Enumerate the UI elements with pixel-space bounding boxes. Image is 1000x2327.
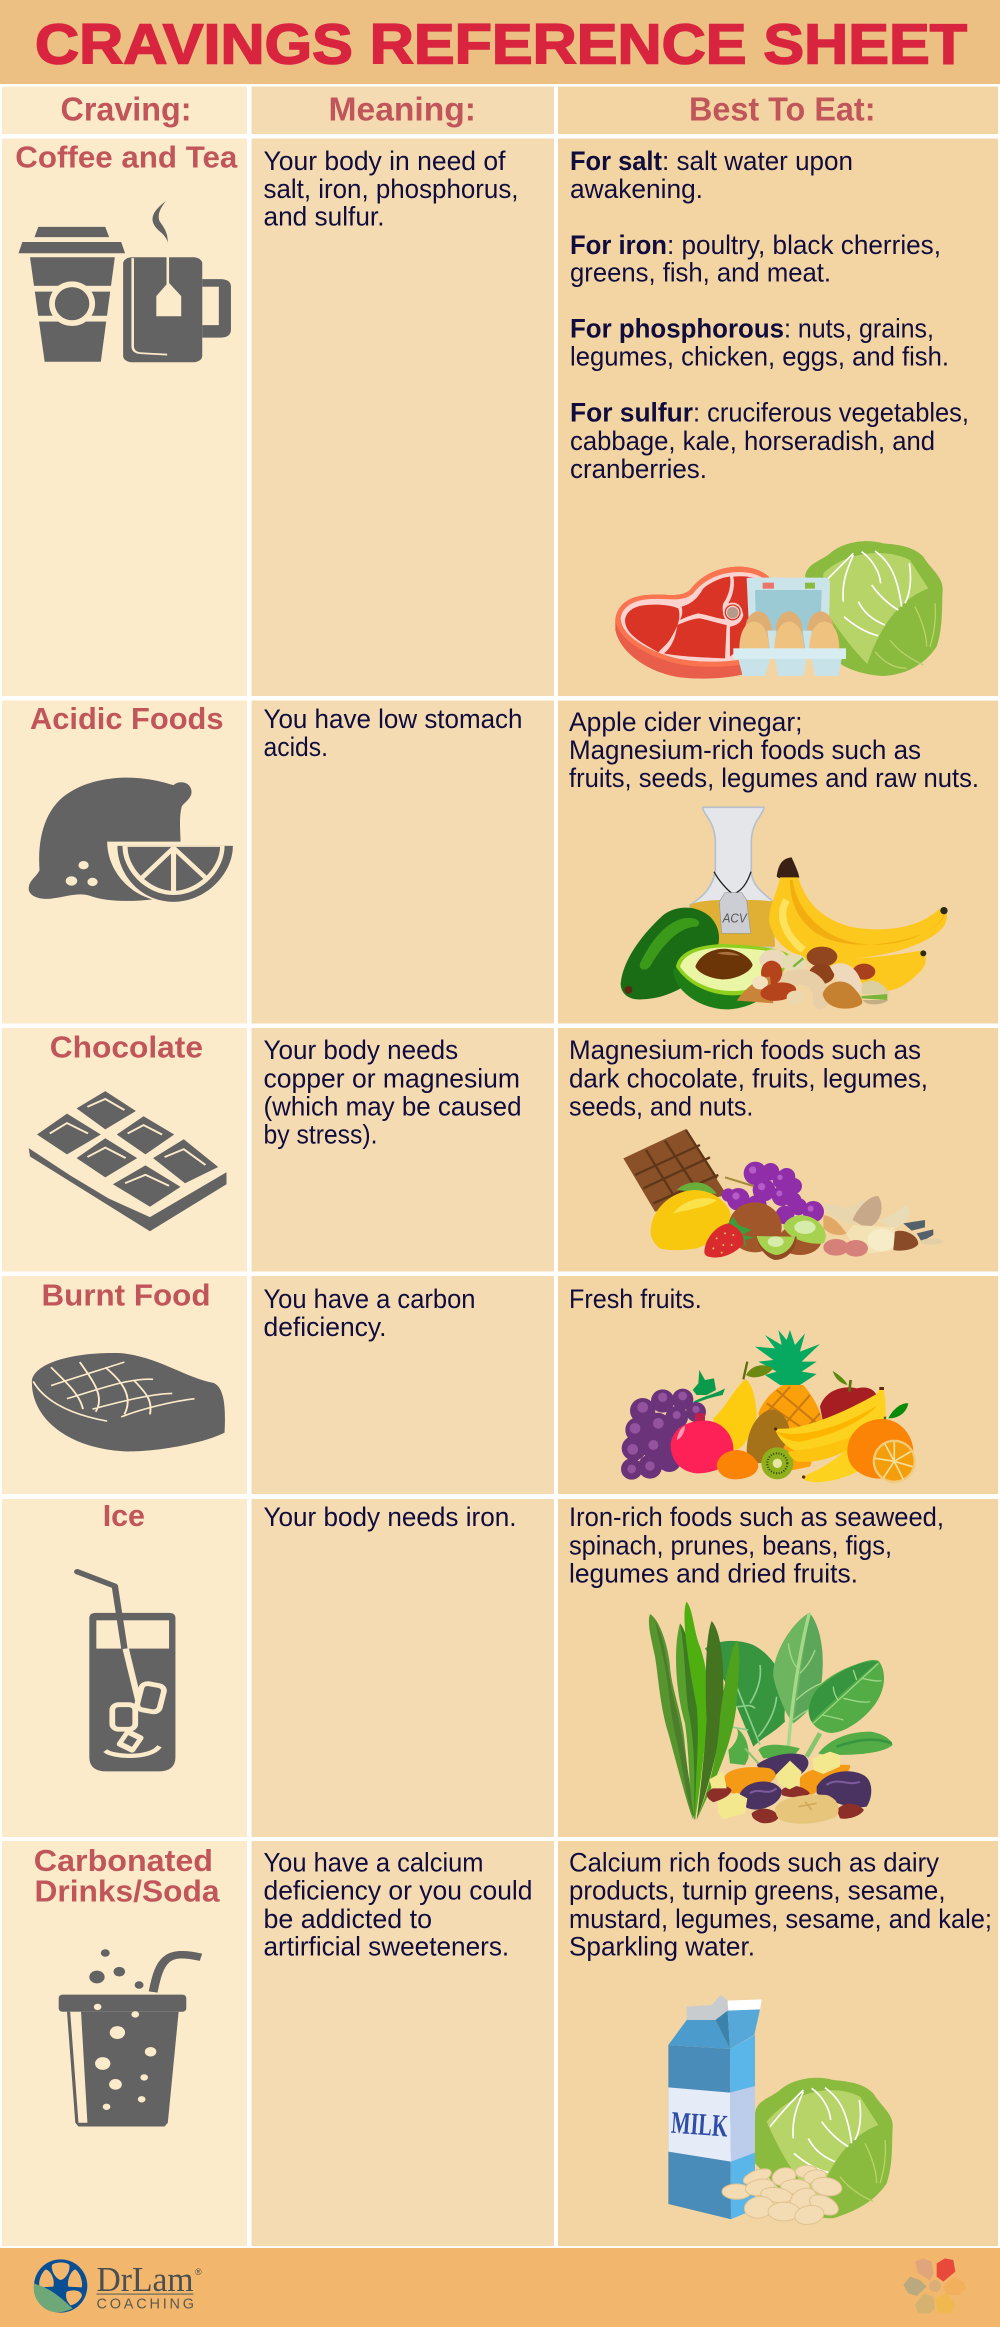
meaning text: acids. <box>264 732 328 762</box>
best to eat text: Magnesium-rich foods such as <box>569 735 921 765</box>
best to eat text: For salt <box>570 146 662 176</box>
icon: lemon <box>29 778 234 902</box>
food illustration: fresh fruits <box>621 1330 916 1483</box>
best to eat text: : cruciferous vegetables, <box>693 398 969 428</box>
best to eat text: legumes and dried fruits. <box>569 1558 858 1588</box>
logo: DrLam Coaching <box>34 2259 202 2313</box>
food illustration: meat, eggs and cabbage <box>615 541 943 679</box>
food illustration: vinegar, avocado, bananas, nuts <box>621 807 948 1009</box>
best to eat text: awakening. <box>570 174 703 204</box>
meaning text: Your body needs <box>264 1035 458 1065</box>
best to eat text: For iron <box>570 230 667 260</box>
food illustration: seaweed, spinach, dried fruits <box>649 1602 893 1824</box>
best to eat text: For sulfur <box>570 398 693 428</box>
best to eat text: fruits, seeds, legumes and raw nuts. <box>569 763 979 793</box>
best to eat text <box>570 146 969 484</box>
best to eat text: : salt water upon <box>662 146 853 176</box>
craving name: Burnt Food <box>42 1278 210 1313</box>
panel: chocolate row <box>2 1028 998 1272</box>
best to eat text: : poultry, black cherries, <box>667 230 941 260</box>
best to eat text: Sparkling water. <box>569 1932 755 1962</box>
panel: ice row <box>2 1498 998 1837</box>
logo wordmark: DrLam <box>96 2260 194 2299</box>
best to eat text: cranberries. <box>570 454 707 484</box>
best to eat text <box>569 1848 992 1962</box>
logo tagline: COACHING <box>96 2296 194 2312</box>
title band <box>0 0 1000 84</box>
meaning text: copper or magnesium <box>264 1064 520 1094</box>
icon: coloured flower mark <box>903 2258 966 2313</box>
best to eat text <box>569 1502 944 1588</box>
best to eat text: Magnesium-rich foods such as <box>569 1035 921 1065</box>
best to eat text <box>569 707 979 793</box>
title: CRAVINGS REFERENCE SHEET <box>35 12 967 76</box>
food illustration: milk, cabbage, beans: MILK <box>670 2105 730 2144</box>
food illustration: milk, cabbage, beans <box>668 1995 893 2227</box>
icon: chocolate bar <box>29 1091 226 1231</box>
panel: acidic foods row <box>2 700 998 1024</box>
best to eat text: spinach, prunes, beans, figs, <box>569 1531 892 1561</box>
icon: soda cup <box>59 1949 201 2127</box>
best to eat text: Apple cider vinegar; <box>569 707 802 737</box>
best to eat text: dark chocolate, fruits, legumes, <box>569 1064 928 1094</box>
meaning text: Your body needs iron. <box>264 1502 516 1532</box>
meaning text: You have a calcium <box>264 1848 484 1878</box>
header: best to eat: Best To Eat: <box>689 90 876 128</box>
best to eat text: Calcium rich foods such as dairy <box>569 1848 939 1878</box>
meaning text: deficiency. <box>264 1312 386 1342</box>
craving name: Coffee and Tea <box>15 140 238 174</box>
meaning text: You have a carbon <box>264 1284 476 1314</box>
best to eat text: greens, fish, and meat. <box>570 258 831 288</box>
meaning text <box>264 1848 532 1962</box>
meaning text: You have low stomach <box>264 704 522 734</box>
best to eat text: Iron-rich foods such as seaweed, <box>569 1502 944 1532</box>
footer band <box>0 2248 1000 2327</box>
best to eat text: seeds, and nuts. <box>569 1092 753 1122</box>
panel: carbonated drinks row <box>2 1841 998 2246</box>
food illustration: chocolate, fruit and nuts <box>623 1129 943 1260</box>
best to eat text <box>569 1035 928 1122</box>
meaning text: salt, iron, phosphorus, <box>264 174 518 204</box>
table header <box>2 86 998 134</box>
best to eat text: : nuts, grains, <box>784 314 934 344</box>
icon: logo flower emblem <box>34 2259 87 2313</box>
meaning text: and sulfur. <box>264 202 384 232</box>
best to eat text: For phosphorous <box>570 314 784 344</box>
meaning text: deficiency or you could <box>264 1876 532 1906</box>
best to eat text: products, turnip greens, sesame, <box>569 1876 946 1906</box>
icon: coffee cup and tea mug <box>19 201 231 362</box>
meaning text <box>264 146 518 232</box>
meaning text: by stress). <box>264 1119 378 1149</box>
craving name: Chocolate <box>50 1030 203 1065</box>
meaning text: artirficial sweeteners. <box>264 1932 509 1962</box>
meaning text: be addicted to <box>264 1904 432 1934</box>
meaning text <box>264 1284 476 1342</box>
craving name <box>34 1843 220 1909</box>
meaning text <box>264 704 522 762</box>
best to eat text: Fresh fruits. <box>569 1284 702 1314</box>
craving name: Acidic Foods <box>30 701 224 736</box>
best to eat text: cabbage, kale, horseradish, and <box>570 426 935 456</box>
icon: iced drink <box>77 1572 175 1771</box>
meaning text: (which may be caused <box>264 1092 522 1122</box>
craving name: Carbonated <box>34 1843 213 1878</box>
craving name: Drinks/Soda <box>34 1874 220 1909</box>
header: craving: Craving: <box>60 90 192 128</box>
panel: burnt food row <box>2 1276 998 1494</box>
panel: coffee and tea row <box>2 138 998 696</box>
logo: DrLam Coaching: ® <box>195 2267 202 2277</box>
food illustration: vinegar, avocado, bananas, nuts: ACV <box>722 912 748 926</box>
craving name: Ice <box>103 1498 145 1533</box>
best to eat text: legumes, chicken, eggs, and fish. <box>570 342 949 372</box>
icon: burnt steak <box>32 1353 225 1451</box>
meaning text: Your body in need of <box>264 146 506 176</box>
header: meaning: Meaning: <box>328 90 476 128</box>
meaning text <box>264 1035 522 1149</box>
